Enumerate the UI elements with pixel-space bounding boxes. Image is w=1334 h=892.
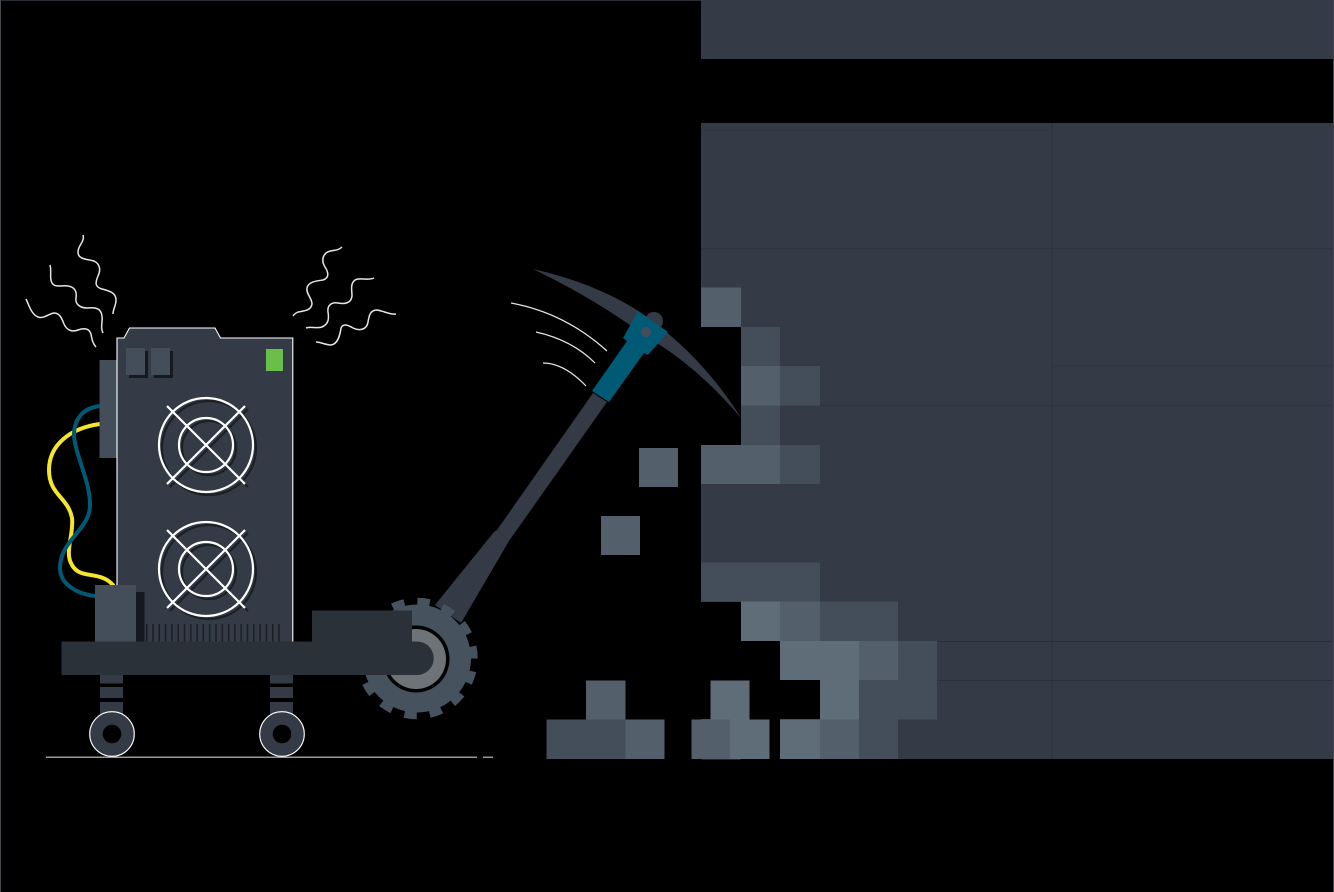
- pickaxe: handle shaft: [497, 393, 607, 541]
- pickaxe: knob: [645, 312, 663, 330]
- heat waves: left: [26, 235, 116, 347]
- wire: teal: [60, 406, 100, 596]
- miner: body: [117, 328, 293, 642]
- wall: top band: [701, 0, 1333, 59]
- cart: platform and handle mount: [62, 610, 434, 675]
- wires: [49, 406, 113, 596]
- rubble pile: middle: [692, 680, 770, 760]
- rubble: floating block lower: [601, 516, 640, 555]
- ground line: [46, 756, 493, 758]
- cart: right wheel: [260, 712, 304, 756]
- wall: main pixelated block: [701, 123, 1333, 759]
- miner: side panel: [100, 360, 118, 458]
- pickaxe: pivot: [641, 327, 651, 337]
- miner: switches: [126, 348, 173, 378]
- miner: vent slots: [147, 624, 279, 642]
- miner unit: [100, 328, 293, 642]
- pickaxe: [435, 269, 741, 623]
- cart: left wheel: [90, 712, 134, 756]
- pickaxe: handle base: [435, 530, 509, 623]
- power box: [95, 585, 144, 642]
- rubble pile: left: [546, 680, 664, 759]
- heat waves: right: [293, 247, 396, 345]
- wire: yellow: [49, 424, 113, 585]
- cart: [62, 610, 434, 756]
- fan: upper: [159, 398, 256, 495]
- wall: lighter pixel tiles: [701, 288, 937, 759]
- cart: legs: [100, 675, 293, 722]
- miner: green indicator: [266, 349, 283, 371]
- motion lines: [511, 303, 607, 386]
- pickaxe: blade: [533, 269, 741, 418]
- rubble: floating block upper: [639, 448, 678, 487]
- gear: [360, 602, 474, 716]
- fan: lower: [159, 522, 256, 619]
- pickaxe: teal grip: [592, 311, 668, 402]
